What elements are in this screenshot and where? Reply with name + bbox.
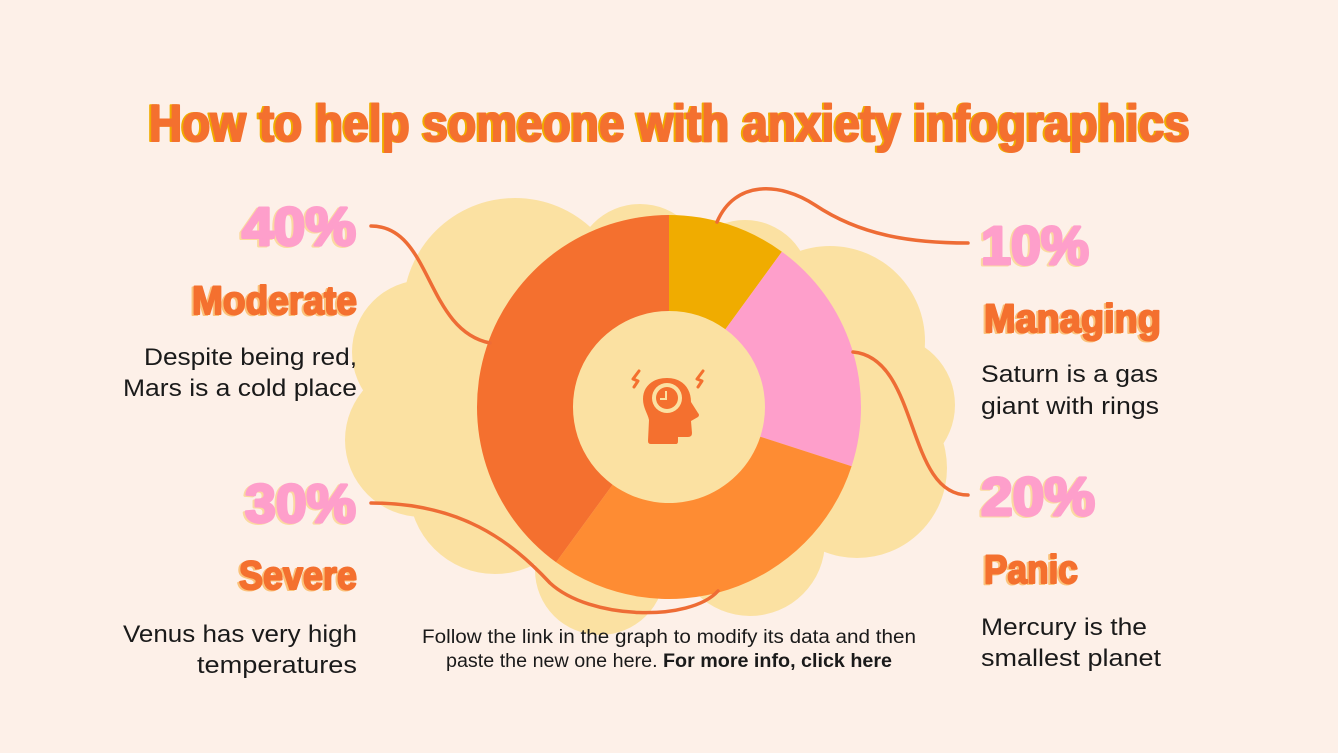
connector: 20% <box>853 352 968 495</box>
description: panic: smallest planet <box>981 645 1161 672</box>
slice: severe 30% <box>556 437 852 599</box>
center icon: head with clock <box>633 371 703 444</box>
footnote: paste the new one here. For more info, click here <box>446 651 892 672</box>
value: 40%: 40% <box>240 198 354 258</box>
block: 10% managing <box>979 216 1161 420</box>
value: 40%: 40% <box>242 197 356 257</box>
value: 20%: 20% <box>981 467 1095 527</box>
value: 10%: 10% <box>979 217 1087 277</box>
label: managing: Managing <box>982 298 1159 342</box>
value: 30%: 30% <box>243 475 354 535</box>
description: moderate: Mars is a cold place <box>123 375 357 402</box>
slice: moderate 40% <box>477 215 669 562</box>
label: panic: Panic <box>982 549 1076 593</box>
description: severe <box>123 621 357 679</box>
value: 30%: 30% <box>245 474 356 534</box>
title: How to help someone with anxiety infographics <box>147 95 1188 153</box>
block: 30% severe <box>123 474 357 679</box>
description: severe: Venus has very high <box>123 621 357 648</box>
value: 20%: 20% <box>979 468 1093 528</box>
description: moderate: Despite being red, <box>144 344 357 371</box>
label: managing: Managing <box>984 297 1161 341</box>
title: How to help someone with anxiety infographics <box>149 95 1190 153</box>
description: managing <box>981 361 1159 420</box>
block: 40% moderate <box>123 197 357 402</box>
cloud background <box>345 198 955 635</box>
label: moderate: Moderate <box>190 280 355 324</box>
connector: 10% <box>717 189 968 243</box>
description: severe: temperatures <box>197 652 357 679</box>
label: panic: Panic <box>984 548 1078 592</box>
value: 10%: 10% <box>981 216 1089 276</box>
block: 20% panic <box>979 467 1161 672</box>
slice: managing 10% <box>669 215 782 329</box>
description: panic <box>981 614 1161 672</box>
label: severe: Severe <box>239 554 357 598</box>
connector: 40% <box>371 226 490 343</box>
connector: 30% <box>371 503 718 613</box>
footnote: Follow the link in the graph to modify its data and then <box>422 627 916 648</box>
description: moderate <box>123 344 357 402</box>
footnote <box>422 627 916 672</box>
donut chart <box>477 215 861 599</box>
label: moderate: Moderate <box>192 279 357 323</box>
description: panic: Mercury is the <box>981 614 1147 641</box>
description: managing: Saturn is a gas <box>981 361 1158 388</box>
description: managing: giant with rings <box>981 393 1159 420</box>
label: severe: Severe <box>237 555 355 599</box>
slice: panic 20% <box>725 252 861 466</box>
